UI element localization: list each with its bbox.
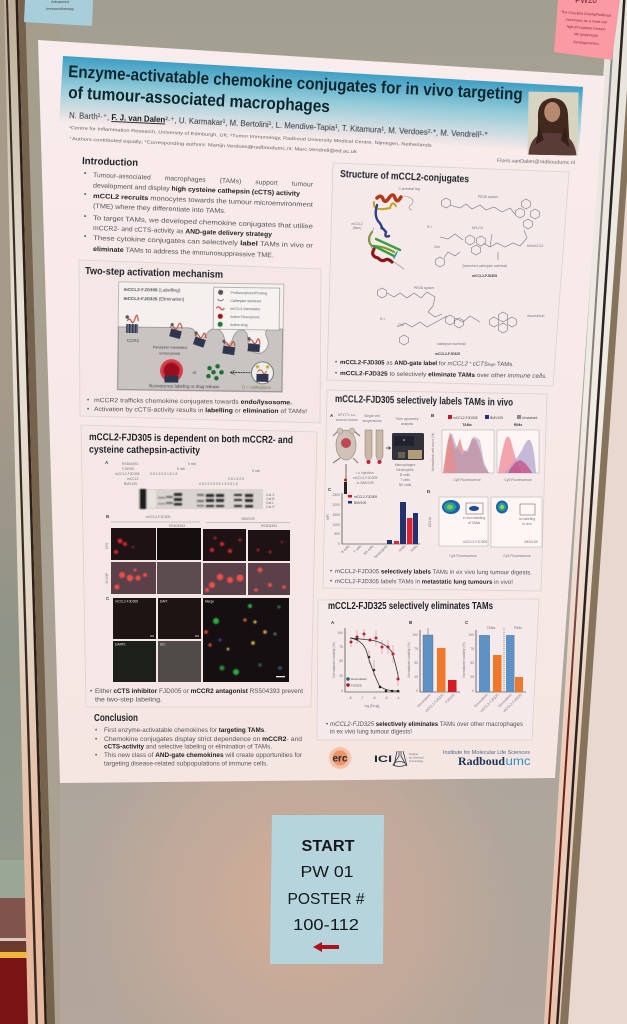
structure bullets [335, 359, 547, 380]
affiliations [69, 125, 433, 154]
western blot: Cat S [266, 505, 275, 509]
mechanism diagram: fluorescence labeling or drug release [149, 383, 220, 389]
legend: Active drug [230, 323, 248, 327]
introduction section: These cytokine conjugates can selectively label TAMs in vivo or [93, 235, 314, 250]
TAMs histogram [442, 430, 494, 473]
note: pink card top right: monocytes as a novel cell [565, 18, 607, 24]
C bar chart: 1500 [332, 513, 340, 517]
A dose response chart: -4 [396, 696, 400, 700]
start card text: START [302, 838, 355, 855]
micrographs C: GARP1 [115, 642, 126, 646]
labelled cell lysosome [160, 359, 183, 383]
micrographs B [111, 528, 290, 595]
western blot: A [105, 460, 109, 465]
two-step bullets: • [87, 406, 89, 413]
icon: cytometer [392, 433, 424, 460]
C bar chart: Neutrophils [373, 544, 389, 559]
affiliations: ¹Centre for Inflammation Research, University of Edinburgh, UK; ²Tumor Immunology, Radboud University Medical Centre, Nijmegen, Netherlands [69, 125, 433, 148]
conclusion section: targeting disease-related subpopulations of immune cells. [104, 760, 268, 768]
heading: structure: Structure of mCCL2-conjugates [340, 169, 470, 185]
protein labels: mCCL2 [351, 222, 363, 226]
mechanism diagram: mCCL2-FJD325 (Elimination) [123, 296, 185, 302]
mechanism diagram: mCCL2-FJD305 (Labelling) [124, 287, 181, 293]
western blot: 0.5 1.5 2.5 1.5 1.5 [150, 472, 177, 476]
B histograms [431, 413, 539, 482]
conclusion section: Conclusion [94, 713, 138, 724]
A workflow: KP1771 s.c. [338, 413, 356, 417]
note: blue card top left [24, 0, 93, 26]
chemical structure: FJD325: mCCL2-FJD325 [435, 352, 460, 356]
protein ribbon [369, 195, 413, 269]
western blot: Cat B [266, 497, 275, 501]
panel B labels: RS504393 [169, 524, 185, 528]
poster sheet [38, 40, 605, 783]
C bar chart: T cells [353, 544, 363, 554]
western blot: 0.5 1.5 2.5 [228, 477, 244, 481]
mechanism diagram: D = cathepsins [242, 385, 271, 390]
affiliations: ⁺Authors contributed equally; *Corresponding authors: Martijn.Verdoes@radboudumc.nl; Marc.Vendrell@ed.ac.uk [69, 136, 358, 154]
D flow plots: of TAMs [468, 521, 480, 525]
legend: Active Fluorophore [230, 315, 260, 319]
B bar chart: Normalized viability (%) [407, 642, 411, 678]
C bar chart: mCCL2-FJD305 [354, 495, 377, 499]
introduction section: mCCR2- and cCTS-activity as AND-gate delivery strategy [93, 225, 272, 239]
A dose response chart [331, 620, 400, 708]
B histograms: TAMs [462, 423, 472, 427]
chemical structure: FJD305: PEG8 spacer [478, 195, 499, 199]
C bar chart: TAMs [487, 626, 496, 630]
panel: FJD325 selectively eliminates TAMs [317, 599, 539, 740]
A workflow: B cells [400, 473, 410, 477]
legend: mCCL2 chemokine [230, 307, 260, 311]
two-step bullets: • [87, 397, 89, 404]
dependence caption: the two-step labeling. [95, 696, 162, 704]
mechanism diagram [117, 282, 284, 392]
B histograms: B [431, 413, 435, 418]
logo: erc: erc [332, 754, 348, 764]
C bar chart: 25 [470, 675, 474, 679]
logo: ICI: for Chemical [409, 756, 424, 760]
C bar chart: 2500 [332, 493, 340, 497]
chemical structure: FJD305: NH₂CO [472, 226, 484, 230]
western blot: BMV109 [124, 482, 137, 486]
title banner [59, 56, 583, 153]
B bar chart [407, 620, 460, 713]
western blot: 5 min [252, 469, 260, 473]
D flow plots: in vivo [522, 522, 532, 526]
A workflow: tumour mouse [336, 418, 358, 422]
western blot: 5 min [188, 462, 196, 466]
logo: erc [329, 747, 351, 769]
logo: Radboudumc: Radboud [458, 756, 506, 768]
mechanism diagram: or [192, 370, 197, 375]
C bar chart: Normalized viability (%) [462, 642, 466, 678]
D flow plots: Cy5 Fluorescence [449, 554, 477, 558]
B bar chart: Doxorubicin [416, 693, 432, 708]
D flow plots: mCCL2-FJD305 [463, 540, 487, 544]
C bar chart: 500 [334, 532, 340, 536]
C bar chart: mCCL2-FJD325 [480, 693, 500, 713]
A dose response chart: -7 [360, 696, 364, 700]
start card text: PW 01 [300, 864, 354, 881]
C bar chart: 0 [338, 542, 340, 546]
A workflow: i.v. injection [356, 471, 374, 475]
introduction section: • [84, 191, 87, 198]
western blot: FJD005 [122, 467, 134, 471]
A dose response chart: 100 [337, 631, 343, 635]
western blot: Cat L [266, 501, 274, 505]
A dose response chart: -8 [348, 696, 352, 700]
left frame post [4, 0, 55, 1024]
conclusion section: This new class of AND-gate chemokines will create opportunities for [104, 752, 302, 759]
introduction section: (TME) where they differentiate into TAMs. [93, 203, 226, 215]
eliminates caption [326, 722, 523, 736]
icon: tubes [365, 430, 383, 464]
dependence caption [90, 688, 303, 704]
D flow plots: no labeling [519, 517, 535, 521]
panel: FJD305 selectively labels TAMs [323, 390, 547, 591]
logo: Radboudumc: umc [506, 756, 531, 768]
conclusion section: • [95, 752, 97, 759]
A workflow [330, 413, 424, 494]
A dose response chart: -6 [372, 696, 376, 700]
A workflow: or BMV109 [357, 481, 374, 485]
start card text: 100-112 [293, 917, 359, 934]
note: pink card top right: Sensogenomics [573, 40, 599, 46]
protein labels: (blue) [353, 226, 361, 230]
heading: labels TAMs: mCCL2-FJD305 selectively labels TAMs in vivo [335, 394, 513, 409]
protein labels: C-terminal tag [398, 187, 420, 191]
arrow: red left [313, 942, 339, 952]
micrographs C [113, 598, 289, 682]
logo: Radboudumc: Institute for Molecular Life Sciences [443, 750, 531, 756]
labels TAMs bullets: • [330, 579, 332, 585]
C bar chart: 0 [472, 689, 474, 693]
A workflow: suspensions [363, 419, 382, 423]
labels TAMs bullets: mCCL2-FJD305 labels TAMs in metastatic lung tumours in vivo! [335, 579, 513, 586]
micrographs C: DAPI [160, 600, 168, 604]
conclusion section: Chemokine conjugates display strict dependence on mCCR2 - and [104, 736, 303, 743]
introduction section: • [84, 213, 87, 220]
protein labels [351, 187, 432, 321]
dependence caption: • [90, 688, 92, 695]
conclusion section: • [95, 736, 97, 743]
B legend: BMV109 [490, 416, 503, 420]
D flow plots: BMV109 [524, 540, 538, 544]
labels TAMs bullets: • [330, 569, 332, 575]
C bar chart: Doxorubicin [473, 693, 489, 708]
heading: eliminates TAMs: mCCL2-FJD325 selectively eliminates TAMs [328, 601, 493, 612]
A workflow: Single cell [364, 414, 380, 418]
introduction section: development and display high cysteine cathepsin (cCTS) activity [93, 183, 300, 198]
C bar chart: MFI [326, 514, 330, 520]
C bar chart: NK cells [363, 544, 375, 556]
D flow plots [427, 489, 542, 558]
note: blue card top left: Immunotherapy [46, 6, 74, 11]
title: Enzyme-activatable chemokine conjugates for in vivo targeting [68, 62, 523, 104]
panel B labels: BMV109 [241, 517, 255, 521]
mechanism diagram: Receptor-mediated [153, 344, 187, 350]
C bar chart [326, 487, 420, 559]
conclusion section: cCTS-activity and selective labeling or elimination of TAMs. [104, 744, 272, 750]
panel B labels [105, 514, 290, 601]
panel B labels: C [106, 596, 110, 601]
C bar chart: 50 [470, 661, 474, 665]
western blot: Cat X [266, 493, 275, 497]
labels TAMs bullets [330, 569, 532, 586]
panel B labels: mCCL2-FJD305 [146, 515, 170, 519]
B bar chart: 75 [414, 647, 418, 651]
chemical structure: FJD305: Quenched cathepsin warhead [462, 264, 507, 268]
panel B labels: RS504393 [261, 524, 277, 528]
D flow plots: D [427, 489, 431, 494]
legend [213, 287, 280, 330]
note: pink card top right: NK lymphocyte [574, 32, 598, 38]
A workflow: Flow cytometry [396, 417, 419, 421]
protein labels: N = [380, 317, 385, 321]
icon: mouse [333, 428, 360, 494]
note: pink card top right [554, 0, 620, 60]
C bar chart: mCCL2-FJD325 [503, 693, 523, 713]
B histograms: RIMs [514, 423, 522, 427]
active drug dots [206, 364, 224, 381]
A dose response chart: 25 [339, 674, 343, 678]
B bar chart: 100 [412, 633, 418, 637]
B legend [448, 415, 537, 420]
chemical structure: FJD305: NHmCCL2 [527, 244, 544, 248]
C bar chart: TAMs [409, 544, 419, 553]
mechanism diagram: endocytosis [159, 350, 180, 356]
A workflow: Neutrophils [396, 468, 414, 472]
chemical structure: FJD305 [434, 195, 544, 278]
A workflow: A [330, 413, 334, 418]
micrographs C: DIC [160, 642, 166, 646]
A workflow: analysis [401, 422, 413, 426]
note: pink card top right: The Checklist Charity/Radboud [561, 10, 611, 18]
western blot [105, 460, 275, 509]
A dose response chart: 75 [339, 645, 343, 649]
author photo [527, 92, 579, 155]
introduction section: eliminate TAMs to address the immunosuppressive TME. [93, 246, 274, 259]
C bar chart: 2000 [332, 503, 340, 507]
C bar chart: RIMs [514, 626, 522, 630]
chemical structure: FJD325 [378, 286, 544, 356]
arrow [230, 370, 256, 375]
protein labels: N = [427, 225, 432, 229]
B histograms: Cy5 Fluorescence [504, 478, 532, 482]
labels TAMs bullets: mCCL2-FJD305 selectively labels TAMs in ex vivo lung tumour digests. [335, 569, 532, 576]
logo: ICI: Institute [409, 752, 419, 756]
conclusion section: First enzyme-activatable chemokines for targeting TAMs. [104, 727, 266, 734]
C bar chart: BMV109 [354, 501, 366, 505]
B histograms: Normalized cell count (%) [431, 433, 435, 471]
heading: dependence: cysteine cathepsin-activity [89, 445, 200, 456]
structure bullets: • [335, 371, 337, 377]
C bar chart: 100 [468, 633, 474, 637]
B bar chart: 0 [416, 689, 418, 693]
D flow plots: in vivo labeling [463, 516, 485, 520]
right frame post [544, 0, 627, 1024]
introduction section: To target TAMs, we developed chemokine conjugates that utilise [93, 215, 313, 230]
A dose response chart: 50 [339, 659, 343, 663]
B legend: mCCL2-FJD305 [453, 416, 478, 420]
C bar chart: 75 [470, 647, 474, 651]
western blot: 0.5 1.5 2.5 0.5 1.5 2.5 1.5 [199, 482, 238, 486]
eliminates caption: mCCL2-FJD325 selectively eliminates TAMs over other macrophages [330, 722, 523, 728]
C bar chart: Doxorubicin [497, 693, 513, 708]
dependence caption: Either cCTS inhibitor FJD005 or mCCR2 antagonist RS504393 prevent [95, 688, 303, 695]
start card [270, 815, 384, 964]
panel: two-step activation mechanism [79, 260, 321, 423]
A dose response chart: log [Drug] [365, 704, 379, 708]
C bar chart: C [328, 487, 332, 492]
micrographs C: mCCL2-FJD305 [115, 600, 138, 604]
B bar chart: 25 [414, 675, 418, 679]
panel B labels: B [106, 514, 110, 519]
structure bullets: mCCL2-FJD305 as AND-gate label for mCCL2⁺ cCTShigh TAMs. [340, 359, 514, 368]
logo: ICI [374, 751, 424, 766]
chemical structure: FJD325: doxorubicin [527, 314, 544, 318]
heading: two-step activation: Two-step activation mechanism [85, 266, 223, 281]
note: pink card top right: high-throughput immuno [566, 25, 606, 31]
vesicle [251, 362, 274, 384]
two-step bullets [87, 397, 307, 415]
western blot: mCCL2-FJD305 [115, 472, 140, 476]
chemical structure: FJD305: Cbz [434, 245, 440, 249]
presenter email: Floris.vanDalen@radboudumc.nl [497, 158, 575, 166]
RIMs histogram [497, 430, 539, 473]
left room strip [0, 0, 29, 1024]
D flow plots: CD11b [428, 517, 432, 527]
eliminates caption: • [326, 722, 328, 728]
B bar chart: B [409, 620, 413, 625]
conclusion section [94, 713, 303, 768]
two-step bullets: mCCR2 trafficks chemokine conjugates towards endo/lysosome. [94, 397, 292, 406]
introduction section: mCCL2 recruits monocytes towards the tumour microenvironment [93, 193, 313, 209]
micrographs C: Merge [205, 600, 214, 604]
CCR2 receptor: CCR2 [127, 338, 140, 343]
A dose response chart: 0 [341, 689, 343, 693]
B bar chart: 50 [414, 661, 418, 665]
eliminates caption: in ex vivo lung tumour digests! [330, 730, 412, 736]
D flow plots: Cy5 Fluorescence [503, 554, 531, 558]
introduction section: • [84, 233, 87, 240]
start card text: POSTER # [288, 891, 365, 908]
C bar chart: B cells [340, 544, 351, 554]
A dose response chart: FJD325 [351, 684, 362, 688]
A dose response chart: A [331, 620, 335, 625]
endocytosing receptors [169, 323, 261, 356]
panel B labels: LPS [105, 542, 109, 549]
C bar chart: C [465, 620, 469, 625]
panel: dependence on mCCR2 and cysteine cathepsin [81, 425, 317, 707]
introduction section: Tumour-associated macrophages (TAMs) support tumour [93, 172, 314, 189]
logo: ICI: ICI [374, 754, 392, 765]
A dose response chart: Normalized viability (%) [332, 642, 336, 678]
logo: Radboudumc [443, 750, 531, 768]
CCR2 receptor [125, 315, 140, 343]
A workflow: mCCL2-FJD305 [353, 476, 377, 480]
A workflow: NK cells [399, 483, 412, 487]
chemical structure: FJD325: Cbz [398, 323, 404, 327]
western blot: mCCL2 [127, 477, 139, 481]
A dose response chart: Doxorubicin [351, 677, 367, 681]
C bar chart: RIMs [398, 544, 407, 553]
A workflow: T cells [400, 478, 410, 482]
legend: Cathepsin warhead [230, 299, 261, 303]
conclusion section: • [95, 727, 97, 734]
chemical structure: FJD325: PEG8 spacer [414, 286, 435, 290]
introduction section: • [84, 170, 87, 177]
A workflow: Macrophages [395, 463, 416, 467]
two-step bullets: Activation by cCTS-activity results in labelling or elimination of TAMs! [94, 406, 307, 415]
western blot: RS504393 [122, 462, 138, 466]
chemical structure: FJD325: cathepsin warhead [437, 342, 466, 346]
start card text [288, 838, 365, 934]
C bar chart: 1000 [332, 523, 340, 527]
structure bullets: mCCL2-FJD325 to selectively eliminate TAMs over other immune cells. [340, 371, 547, 380]
B legend: Unstained [522, 416, 537, 420]
C bar chart [462, 620, 526, 713]
B bar chart: FJD325 [444, 693, 456, 704]
A dose response chart: -5 [384, 696, 388, 700]
western blot: 5 min [177, 467, 185, 471]
B histograms: Cy5 Fluorescence [453, 478, 481, 482]
heading: dependence: mCCL2-FJD305 is dependent on both mCCR2- and [89, 432, 293, 446]
B bar chart: mCCL2-FJD325 [425, 693, 445, 713]
chemical structure: FJD305: mCCL2-FJD305 [472, 274, 497, 278]
panel: structure of mCCL2-conjugates [327, 163, 569, 386]
right wall [566, 170, 627, 1024]
logo: ICI: Immunology [409, 759, 424, 763]
introduction section: Introduction [82, 156, 138, 169]
authors: N. Barth¹·⁺, F. J. van Dalen²·⁺, U. Karmakar¹, M. Bertolini¹, L. Mendive-Tapia¹, T. Kitamura¹, M. Verdoes²·*, M. Vendrell¹·* [69, 110, 488, 140]
title: of tumour-associated macrophages [68, 83, 330, 116]
legend: Profluorophore/Prodrug [231, 291, 267, 295]
structure bullets: • [335, 360, 337, 366]
panel B labels: M-CSF [105, 573, 109, 583]
heading: dependence [89, 432, 293, 456]
introduction section [82, 156, 314, 259]
